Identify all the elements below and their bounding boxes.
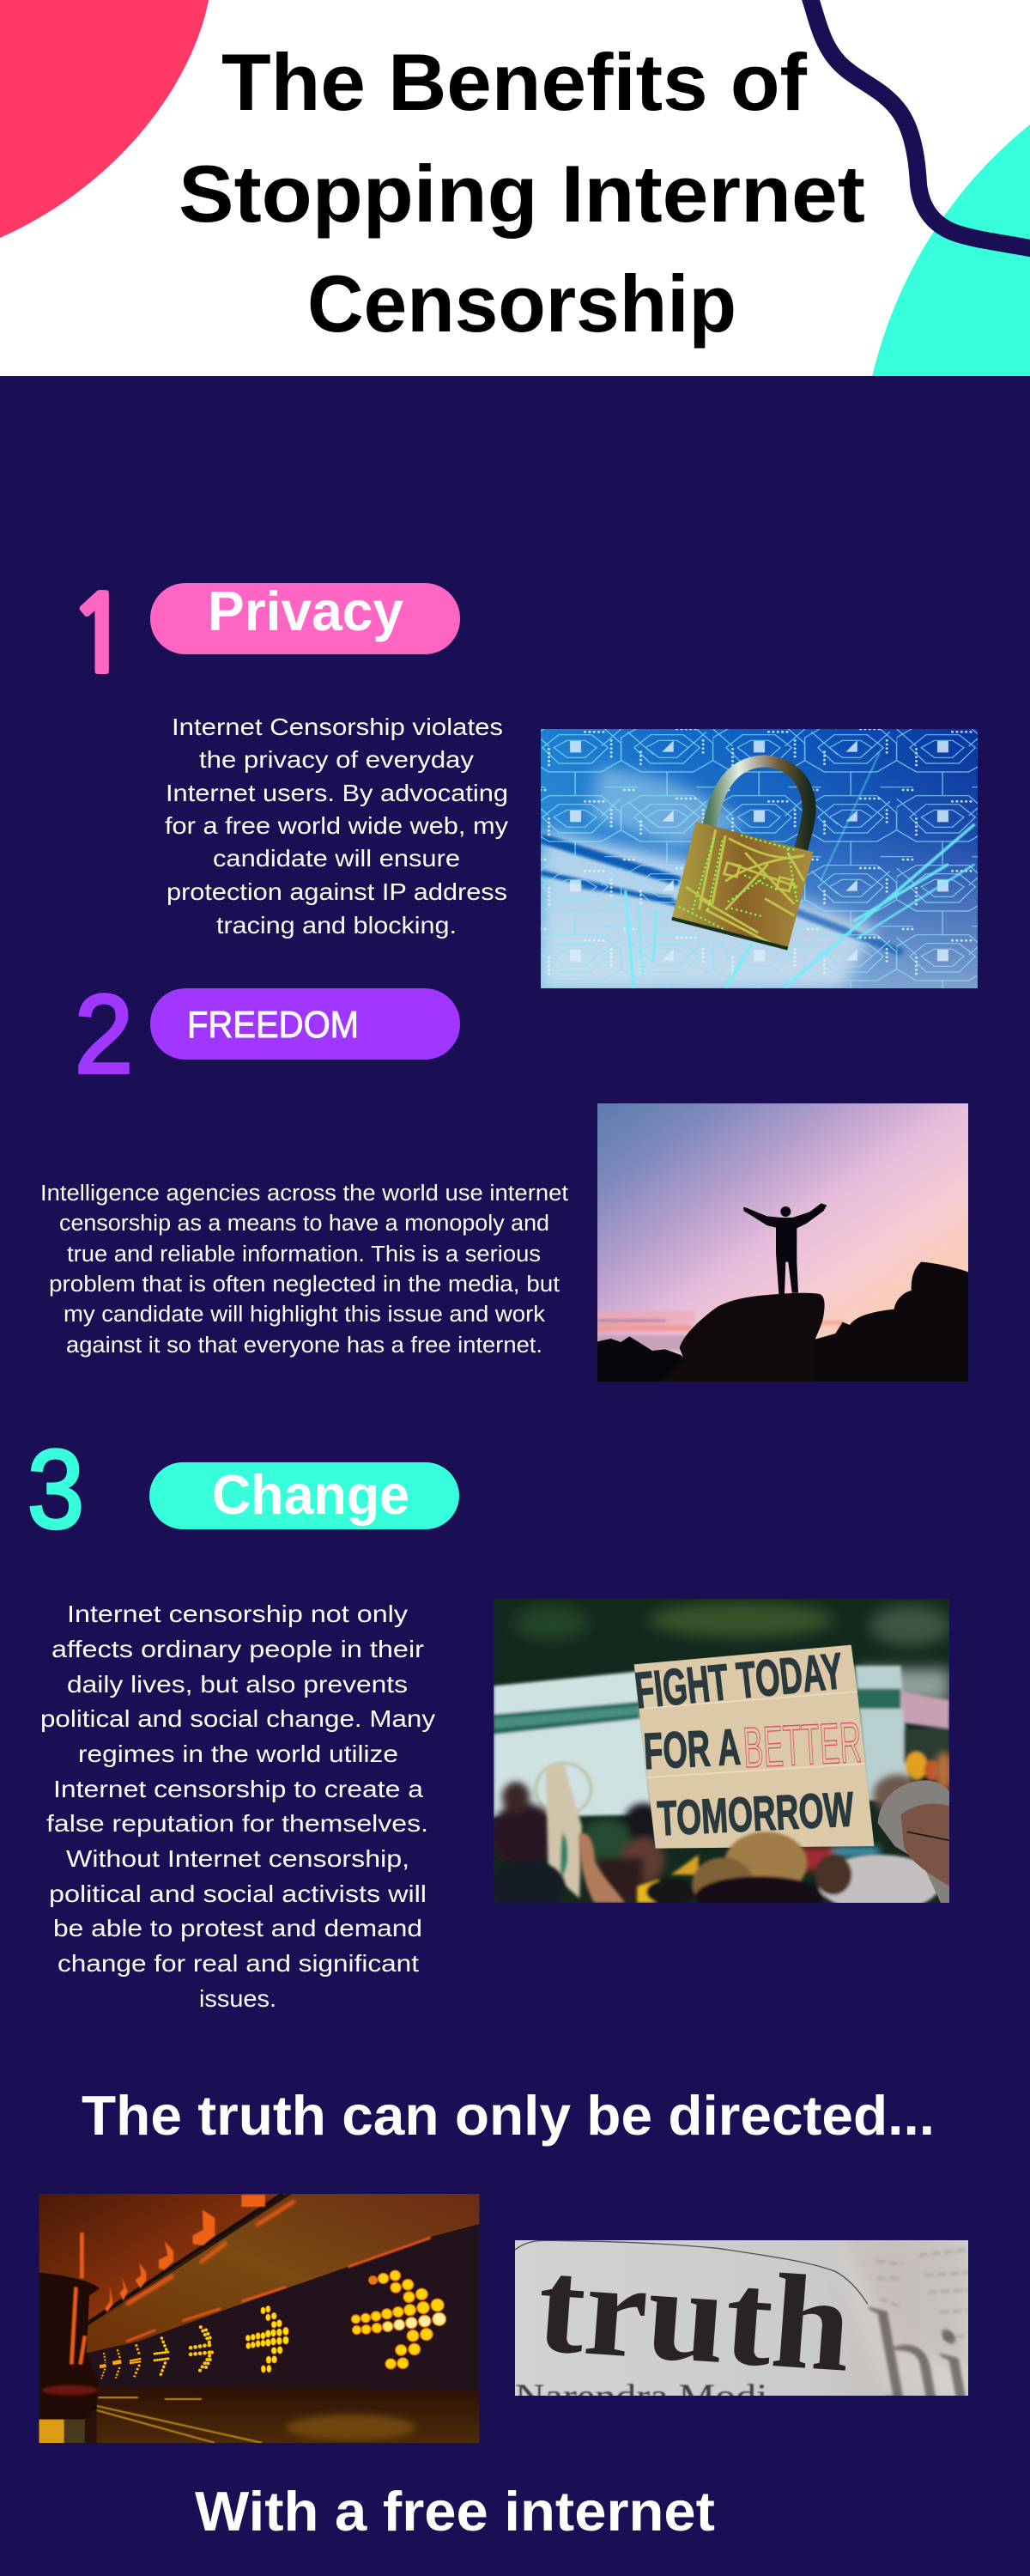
photo: newspaper word truth [515, 2231, 987, 2451]
number 1: 1 [67, 582, 132, 689]
right rocks [815, 1262, 968, 1382]
reflected orange arrows [105, 2195, 265, 2312]
title: Stopping Internet [179, 149, 865, 239]
smaller arrows [154, 2327, 214, 2375]
paper edge line [515, 2240, 868, 2304]
number 2: 2 [75, 971, 133, 1097]
body text: change: Without Internet censorship, [66, 1845, 409, 1872]
cropped byline: Narendra Modi [515, 2377, 768, 2415]
body text: privacy: candidate will ensure [213, 845, 460, 872]
body text: change [40, 1601, 435, 2012]
body text: change: daily lives, but also prevents [67, 1671, 408, 1698]
title [179, 37, 865, 349]
heading pill: Privacy [150, 580, 460, 654]
horizon bushes [597, 1336, 704, 1382]
body text: change: Internet censorship not only [67, 1601, 408, 1627]
small placard [546, 1763, 582, 1899]
body text: change: regimes in the world utilize [78, 1741, 398, 1767]
body text: change: be able to protest and demand [53, 1915, 422, 1941]
dark panel [89, 2224, 479, 2391]
tunnel roof [39, 2194, 286, 2327]
heading pill: Change: Change [212, 1463, 409, 1526]
heading pill: Privacy: Privacy [208, 580, 403, 642]
foreground crowd [488, 1832, 941, 1917]
section 1: privacy [67, 580, 978, 988]
body text: freedom: problem that is often neglected in the media, but [49, 1273, 560, 1297]
body text: freedom: my candidate will highlight this issue and work [64, 1303, 545, 1327]
number 3: 3 [27, 1426, 84, 1552]
beam [87, 2194, 479, 2353]
man silhouette [743, 1203, 827, 1294]
body text: privacy: tracing and blocking. [216, 912, 457, 939]
body text: privacy: the privacy of everyday [199, 746, 474, 773]
heading pill: Change [149, 1462, 459, 1529]
body text: change: affects ordinary people in their [52, 1636, 424, 1662]
word: truth: truth [533, 2231, 856, 2400]
padlock [672, 761, 814, 949]
decorative red corner shape [0, 0, 209, 238]
heading: the truth can only be directed: The truth can only be directed... [82, 2084, 935, 2147]
body text: change: false reputation for themselves. [46, 1810, 428, 1837]
body text: privacy: protection against IP address [167, 878, 507, 905]
heading pill: FREEDOM: FREEDOM [187, 1004, 359, 1046]
body text: change: political and social activists will [49, 1880, 427, 1907]
body text: change: change for real and significant [58, 1950, 419, 1977]
floor [97, 2386, 480, 2443]
body text: privacy: for a free world wide web, my [165, 812, 508, 839]
medium arrow dots [245, 2306, 288, 2372]
body text: change: political and social change. Many [40, 1705, 435, 1732]
big arrow dots [351, 2270, 446, 2369]
decorative dark wavy line [809, 0, 1030, 249]
body text: freedom: against it so that everyone has a free internet. [66, 1334, 542, 1358]
body text: freedom: censorship as a means to have a monopoly and [59, 1212, 549, 1236]
body text: freedom: Intelligence agencies across the world use internet [40, 1182, 568, 1206]
title: Censorship [307, 258, 736, 349]
title: The Benefits of [221, 37, 808, 127]
rock boulder [661, 1293, 825, 1382]
heading pill: FREEDOM [150, 988, 460, 1060]
decorative teal corner shape [872, 125, 1030, 376]
sign text [632, 1643, 863, 1846]
body text: change: Internet censorship to create a [53, 1776, 423, 1802]
section 2: freedom [40, 971, 968, 1382]
header panel [0, 0, 1030, 376]
body text: freedom: true and reliable information. This is a serious [67, 1242, 541, 1267]
older man [878, 1780, 949, 1903]
blurred letters on page fold: hi [863, 2281, 987, 2451]
section 3: change [27, 1426, 953, 2012]
body text: privacy: Internet Censorship violates [172, 714, 503, 740]
sign text: FOR A [642, 1719, 742, 1780]
body text: privacy: Internet users. By advocating [166, 780, 508, 806]
body text: freedom [40, 1182, 568, 1358]
photo: protest sign [494, 1599, 949, 1903]
main placard [632, 1643, 874, 1849]
left pillar [39, 2233, 100, 2443]
heading: with a free internet: With a free internet [195, 2480, 715, 2543]
body text: change: issues. [199, 1985, 276, 2012]
photo: person with raised arms at sunset [597, 1103, 968, 1382]
photo: padlock on circuit board [541, 729, 978, 988]
photo: glowing arrows [39, 2194, 479, 2443]
body text: privacy [165, 714, 508, 939]
